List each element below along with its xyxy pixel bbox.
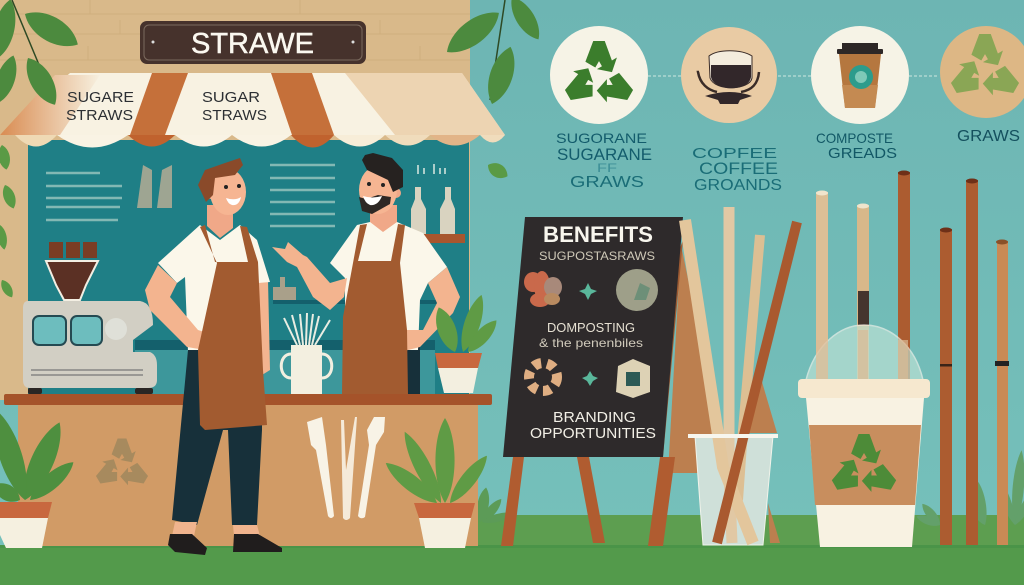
awning label left (66, 89, 134, 124)
icon label: compost grounds: COMPOSTE (816, 130, 893, 146)
board text: opportunities: OPPORTUNITIES (530, 425, 656, 442)
icon label: sugarcane: SUGARANE (557, 145, 652, 164)
grinder (46, 242, 98, 300)
potted plant right (381, 418, 493, 548)
icon circle: coffee cup (681, 27, 777, 123)
icon circle: faded recycling (940, 26, 1024, 118)
icon label: coffee grounds: GROANDS (694, 177, 782, 194)
awning (0, 73, 505, 148)
menu window (28, 140, 469, 396)
shirt (330, 222, 447, 350)
standing tan straws (816, 190, 869, 382)
menu lines left (46, 173, 122, 220)
icon label: coffee grounds: COFFEE (699, 159, 778, 178)
icon circle: takeaway cup (811, 26, 909, 124)
icon label: coffee grounds: COPFEE (692, 145, 777, 162)
vines and leaves (0, 0, 546, 300)
ankles (172, 522, 260, 536)
hair (198, 158, 243, 202)
star icon (579, 283, 597, 300)
icon label: compost grounds (816, 130, 897, 162)
bushes on the right (474, 450, 1024, 529)
stall wall (0, 0, 470, 400)
board text: penenbiles: & the penenbiles (539, 336, 643, 350)
right arm (258, 280, 270, 375)
flower icon (524, 271, 562, 307)
pointing arm (272, 242, 347, 310)
star icon 2 (582, 371, 598, 386)
board subheading: SUGPOSTASRAWS (539, 249, 655, 263)
scallops (15, 135, 505, 148)
beard (359, 195, 391, 214)
badge icon (616, 359, 650, 398)
sign board (140, 21, 366, 64)
icon label: sugarcane: FF (597, 161, 617, 175)
hair (362, 153, 403, 192)
utensils (307, 417, 385, 520)
globe icon (616, 269, 658, 311)
smile (363, 196, 382, 205)
right arm (393, 267, 460, 352)
apron (198, 225, 267, 430)
neck (207, 205, 233, 238)
icon label: sugarcane (556, 130, 652, 191)
left arm (145, 265, 216, 350)
neck (370, 205, 397, 240)
shoes (168, 534, 282, 555)
straws in glass (685, 207, 797, 543)
counter (4, 394, 492, 546)
icon circle: recycling (550, 26, 648, 124)
board heading: BENEFITS (543, 222, 653, 247)
benefits board (503, 217, 683, 457)
menu lines right (270, 165, 335, 226)
glass rim (688, 434, 778, 438)
shirt (158, 225, 270, 352)
clear glass (695, 436, 773, 545)
icon label: sugarcane: GRAWS (570, 174, 644, 191)
head (391, 188, 401, 198)
awning label centre: SUGAR (202, 89, 260, 106)
smile (226, 197, 241, 205)
small jars above the shelf (418, 164, 445, 174)
icon label: graws: GRAWS (957, 128, 1020, 145)
barista right (272, 153, 460, 395)
trousers (172, 350, 262, 525)
awning label left: STRAWS (66, 107, 133, 124)
awning label centre: STRAWS (202, 107, 267, 124)
connector dots (648, 75, 939, 77)
lawn (0, 515, 1024, 585)
sign text: STRAWE (191, 28, 314, 60)
potted plant on counter (430, 293, 501, 393)
standing brown straws (898, 170, 1009, 545)
potted plant left (0, 406, 79, 548)
straw holder (281, 313, 332, 394)
recycling mark on counter (91, 438, 151, 492)
recyclable cup (798, 325, 930, 547)
hanging bags (137, 165, 172, 208)
apron (342, 224, 408, 395)
sandwich board back (668, 245, 780, 543)
awning label left: SUGARE (67, 89, 134, 106)
board text: composting: DOMPOSTING (547, 320, 635, 335)
trousers (406, 345, 420, 395)
espresso machine (23, 301, 157, 394)
icon label: sugarcane: SUGORANE (556, 130, 647, 146)
bottles on shelf (411, 187, 465, 243)
head (206, 189, 216, 199)
icon label: coffee grounds (692, 145, 782, 194)
sun icon (529, 363, 557, 391)
board text: branding: BRANDING (553, 409, 636, 426)
awning label centre (202, 89, 267, 124)
cup recycling icon (826, 434, 900, 500)
icon label: compost grounds: GREADS (828, 145, 897, 162)
board legs (501, 240, 683, 546)
small canister (273, 277, 296, 300)
barista left (145, 158, 282, 555)
